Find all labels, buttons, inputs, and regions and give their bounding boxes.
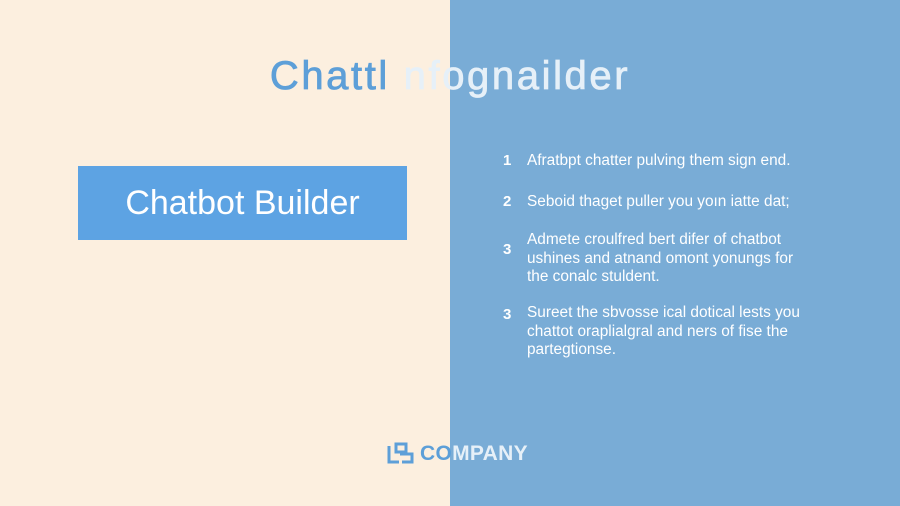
list item 3: [503, 231, 793, 285]
panel: right blue background: [450, 0, 900, 506]
icon: logo mark: [388, 442, 414, 464]
list item 3: the conalc stuldent.: [527, 268, 660, 285]
list item 2: Seboid thaget puller you yoın iatte dat;: [527, 193, 790, 210]
list item 3: ushines and atnand omont yonungs for: [527, 250, 793, 266]
list item 4: partegtionse.: [527, 341, 616, 358]
text: COMPANY: COMPANY: [420, 442, 528, 465]
list item 4: [503, 304, 800, 358]
list item 3: Admete croulfred bert difer of chatbot: [527, 231, 781, 248]
list item 1: Afratbpt chatter pulving them sign end.: [527, 152, 791, 169]
list item 4: Sureet the sbvosse ical dotical lests you: [527, 304, 800, 321]
list item 2: 2: [503, 193, 511, 210]
list item 4: 3: [503, 306, 511, 323]
title: Chattl nfognailder: [270, 54, 630, 98]
heading box: Chatbot Builder: Chatbot Builder: [125, 184, 360, 222]
logo: company: [388, 442, 528, 465]
heading box: Chatbot Builder: [78, 166, 407, 240]
list item 3: 3: [503, 241, 511, 258]
list item 1: 1: [503, 152, 511, 169]
list item 4: chattot oraplialgral and ners of fise the: [527, 322, 788, 340]
